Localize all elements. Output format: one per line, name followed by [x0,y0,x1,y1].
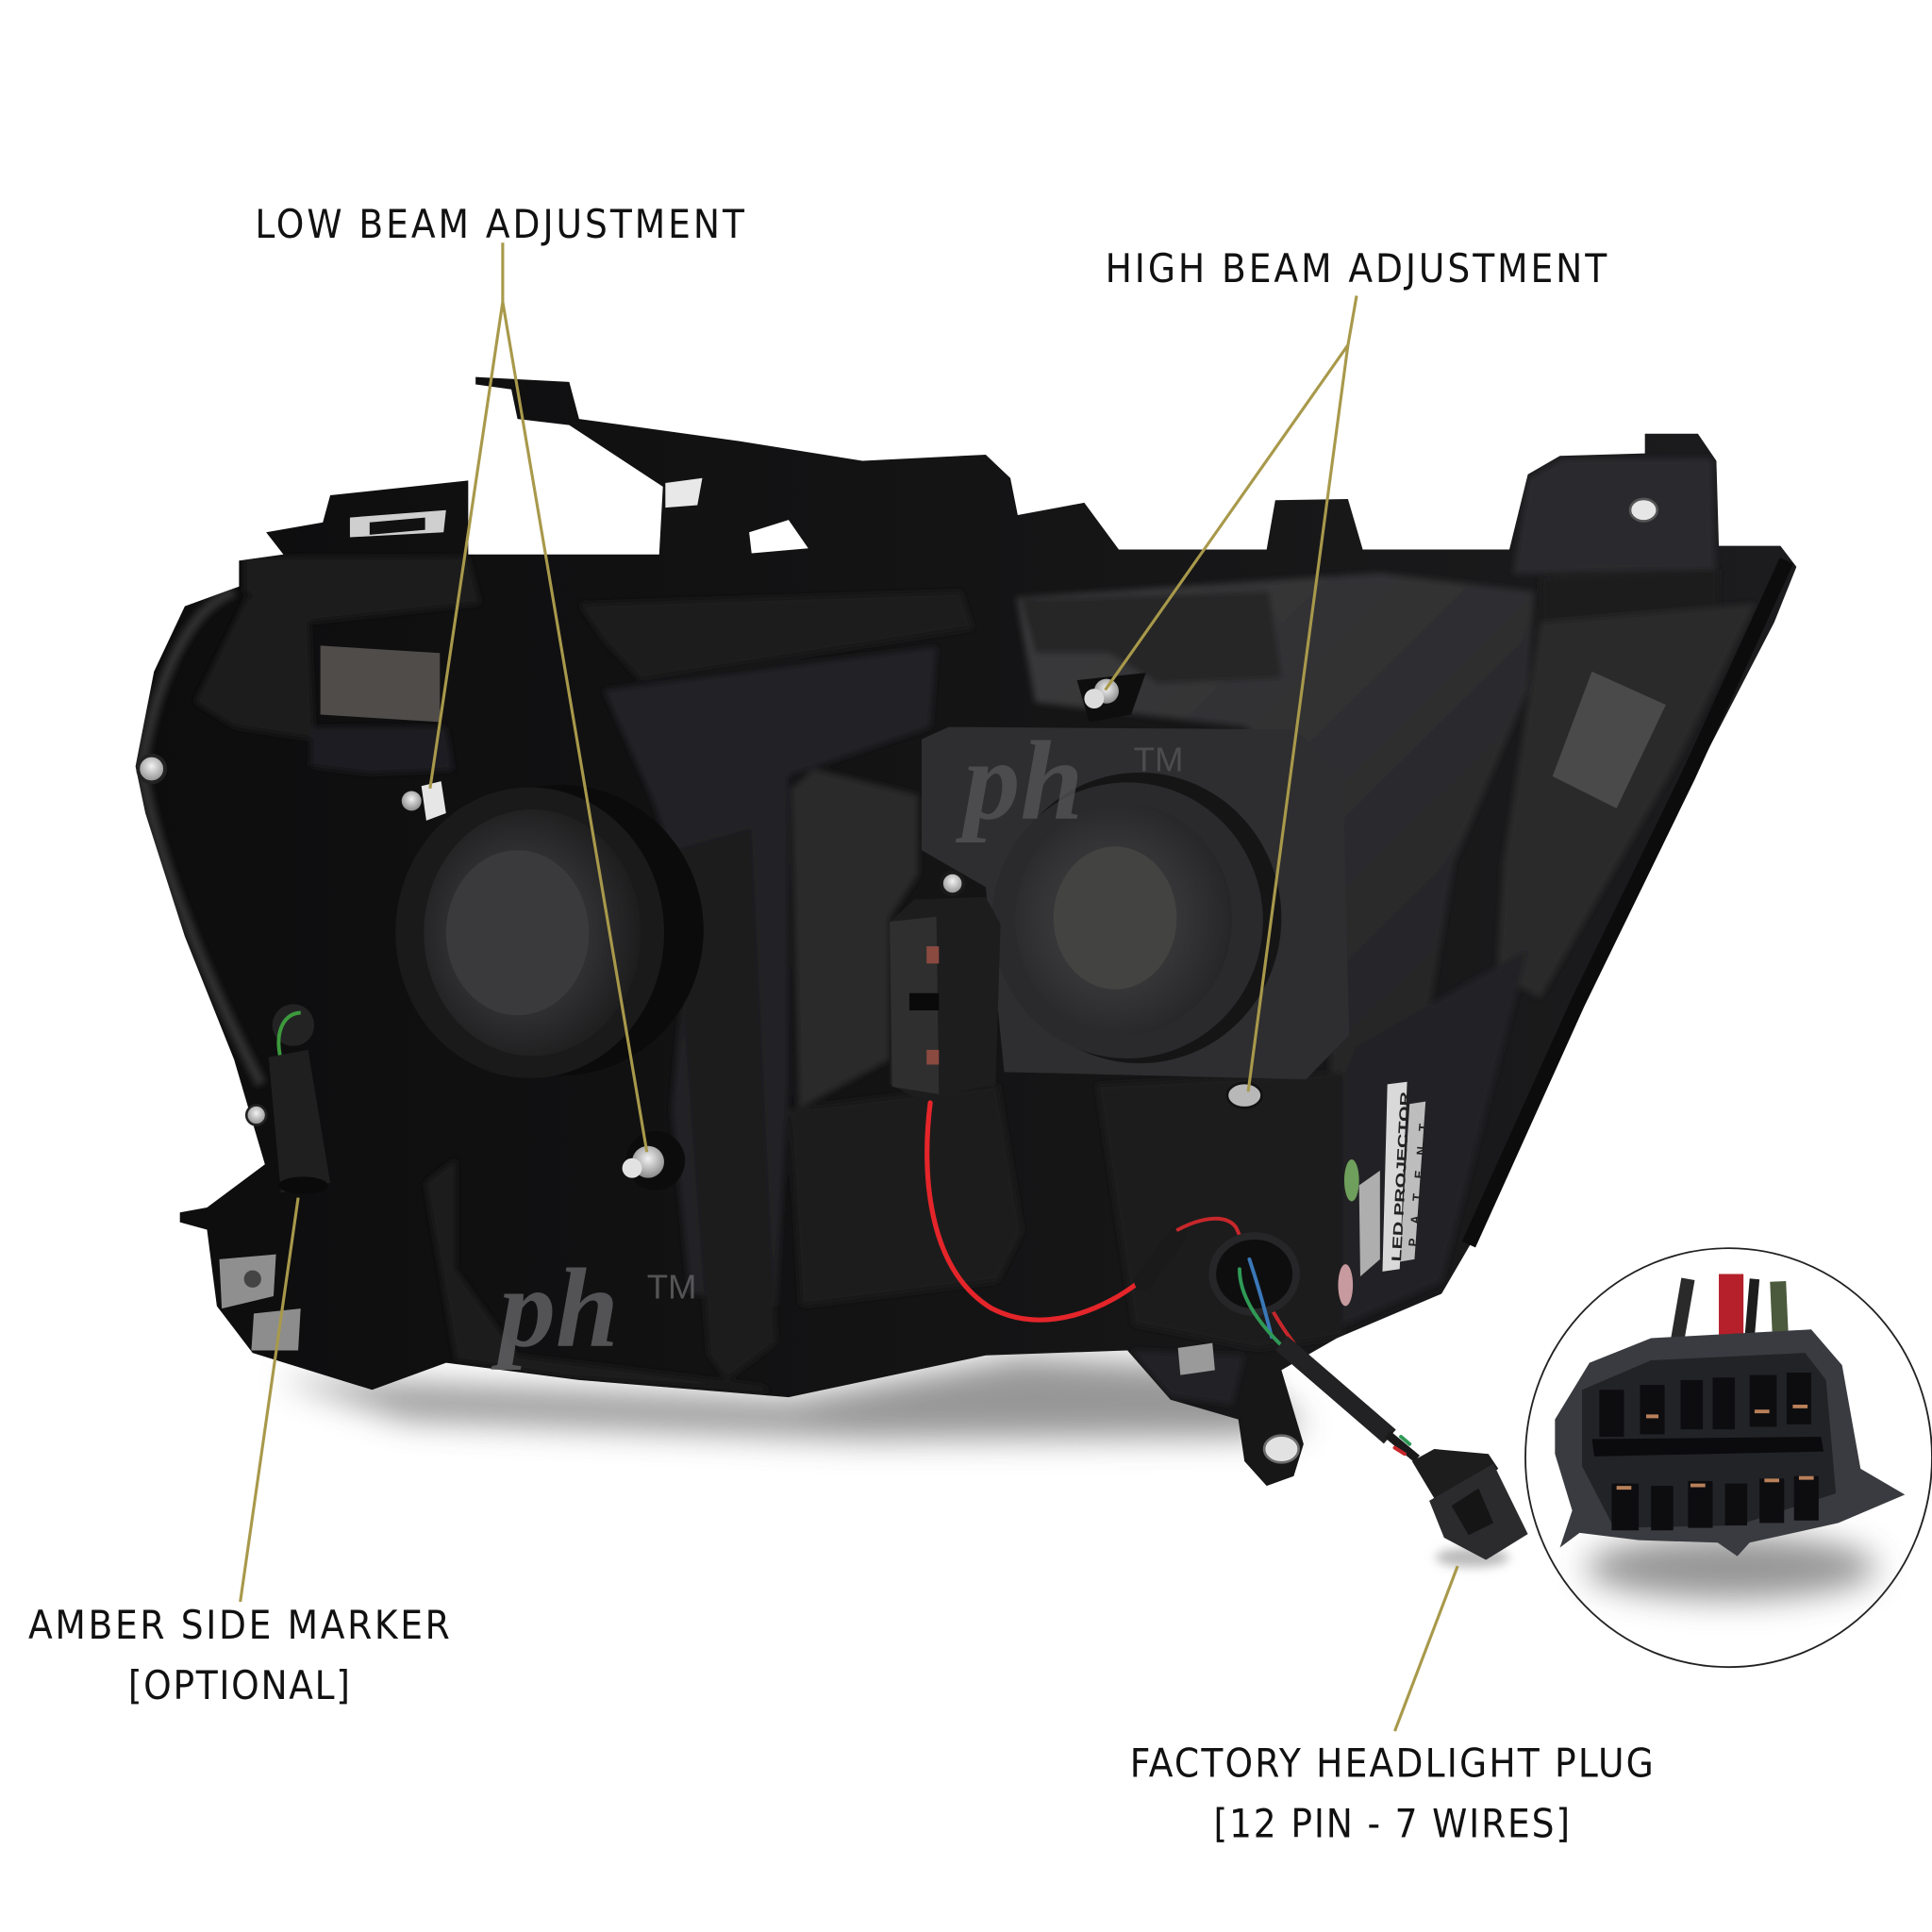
watermark trademark: TM [1134,741,1183,779]
lower connector block [1096,1072,1343,1349]
tab bolt [244,1271,261,1288]
tab lower [251,1308,301,1351]
grommet [273,1004,314,1046]
lens cap [991,782,1263,1058]
low beam adjuster bottom tip [623,1158,641,1178]
top pin row [1599,1373,1811,1437]
housing silhouette [136,377,1796,1486]
connector base [278,1176,327,1194]
small inline connector [1143,1235,1178,1281]
high beam recess [1020,591,1281,684]
LED projector text: LED PROJECTOR [1390,1091,1414,1262]
smoked window right [1553,672,1666,808]
connector shell [1555,1329,1905,1557]
low beam adjuster tip [402,791,422,810]
lower right mount [1131,1351,1244,1405]
lens center [446,850,589,1015]
clip slot [370,518,425,535]
label: low beam adjustment: LOW BEAM ADJUSTMENT [255,201,745,247]
lower box panel [425,1158,770,1392]
mid recess panel [791,769,918,1109]
leader: low beam [430,242,647,1152]
module screw [941,873,963,894]
right ear band [1541,569,1719,623]
high beam adjuster nut [1094,679,1119,704]
leader: factory plug [1395,1566,1457,1731]
connector cavity [1582,1353,1836,1528]
lens cap [395,788,664,1078]
bracket window left [665,478,702,508]
label: factory headlight plug [1130,1740,1654,1846]
red wire [927,1103,1140,1320]
left wing rim [142,591,261,1084]
lower mid panel [789,1084,1023,1306]
watermark letters: ph [955,717,1083,842]
bracket windows [749,520,808,553]
right upper shell [1017,573,1534,1084]
patent label [1400,1102,1425,1261]
high beam adjuster tip [1084,689,1104,708]
watermark trademark: TM [647,1268,697,1307]
screws [138,499,1657,1191]
green sticker [1344,1159,1359,1201]
right projector housing [922,727,1349,1079]
right lens [991,773,1281,1063]
lower right shell [1341,964,1518,1324]
pink sticker [1338,1264,1353,1306]
patent text: PATENT [1406,1124,1430,1247]
lens center [1054,846,1176,990]
inset circle [1525,1248,1932,1667]
left wing panel [194,589,314,740]
tab upper [219,1255,276,1308]
moulded panels [142,458,1756,1405]
watermark lower [491,1244,697,1370]
label line 2: [OPTIONAL] [128,1662,350,1708]
top right hole [1630,499,1657,521]
lens cap face [424,809,641,1056]
green wire fleck [1401,1437,1409,1444]
control module [890,897,1001,1099]
lens cap face [1015,804,1232,1035]
watermark upper [955,717,1183,842]
connector [269,1050,330,1192]
central box face [604,647,937,1306]
module body [890,897,1001,1099]
blue wire [1249,1259,1272,1337]
plug shadow [1436,1547,1509,1567]
green wire [278,1013,301,1059]
copper terminals [1617,1405,1814,1490]
leader: high beam [1106,295,1357,1091]
lower right adjuster [1227,1083,1261,1108]
central upper shelf [579,591,974,680]
wiring harness [927,1103,1417,1458]
red wire to grommet [1178,1219,1293,1343]
clip detail [350,510,446,537]
inset: connector close-up [1525,1248,1932,1667]
callout lines [241,242,1457,1731]
mount hole [1264,1436,1299,1462]
leader: amber side marker [241,1198,298,1602]
right ear [1513,458,1715,575]
LED projector label [1382,1082,1407,1272]
central box right side [680,832,774,1379]
red wire fleck [1395,1448,1405,1454]
lower left mounting tabs [219,1255,301,1351]
high beam adjuster wings [1077,673,1146,722]
label line 1: AMBER SIDE MARKER [28,1602,450,1648]
low beam adjuster bottom nut [632,1146,664,1178]
bottom pin row [1611,1476,1819,1530]
low beam adjuster top [422,781,446,821]
grommet [1212,1236,1296,1312]
plug pins [1452,1489,1493,1535]
window housing [310,727,454,774]
label: amber side marker [28,1602,450,1708]
harness plug [1412,1449,1528,1567]
green wire [1240,1269,1281,1345]
exposed wires [1388,1434,1417,1458]
watermark letters: ph [491,1244,619,1370]
green wire [1778,1281,1780,1337]
label line 1: FACTORY HEADLIGHT PLUG [1130,1740,1654,1786]
lens bezel [418,785,704,1075]
left lens [395,785,704,1078]
red wire [1722,1274,1740,1337]
plug body [1429,1464,1528,1560]
stickers [1338,1082,1430,1306]
low beam adjuster bottom base [626,1131,685,1191]
module side [890,917,939,1094]
blade rim [1469,560,1787,1244]
screw lower left [246,1106,266,1124]
black sleeve [1281,1343,1390,1437]
divider slot [1592,1437,1824,1457]
module latch [909,993,939,1010]
label: high beam adjustment: HIGH BEAM ADJUSTMENT [1106,245,1607,291]
lens bezel [998,773,1281,1063]
headlight assembly [136,377,1796,1567]
smoked window left [321,645,440,722]
silver mount tab [1178,1343,1215,1375]
plug collar [1412,1449,1498,1510]
far right blade panel [1497,604,1756,998]
label line 2: [12 PIN - 7 WIRES] [1214,1800,1570,1846]
side marker pigtail [269,1004,330,1194]
white label [1359,1171,1380,1276]
top block [244,557,480,623]
module contacts [926,946,939,1064]
dark wire [1750,1279,1755,1337]
screw far left [138,756,165,782]
floor shadow [277,1356,1306,1440]
black wire [1677,1279,1688,1343]
inset wires [1677,1274,1780,1343]
inset shadow [1586,1535,1876,1599]
